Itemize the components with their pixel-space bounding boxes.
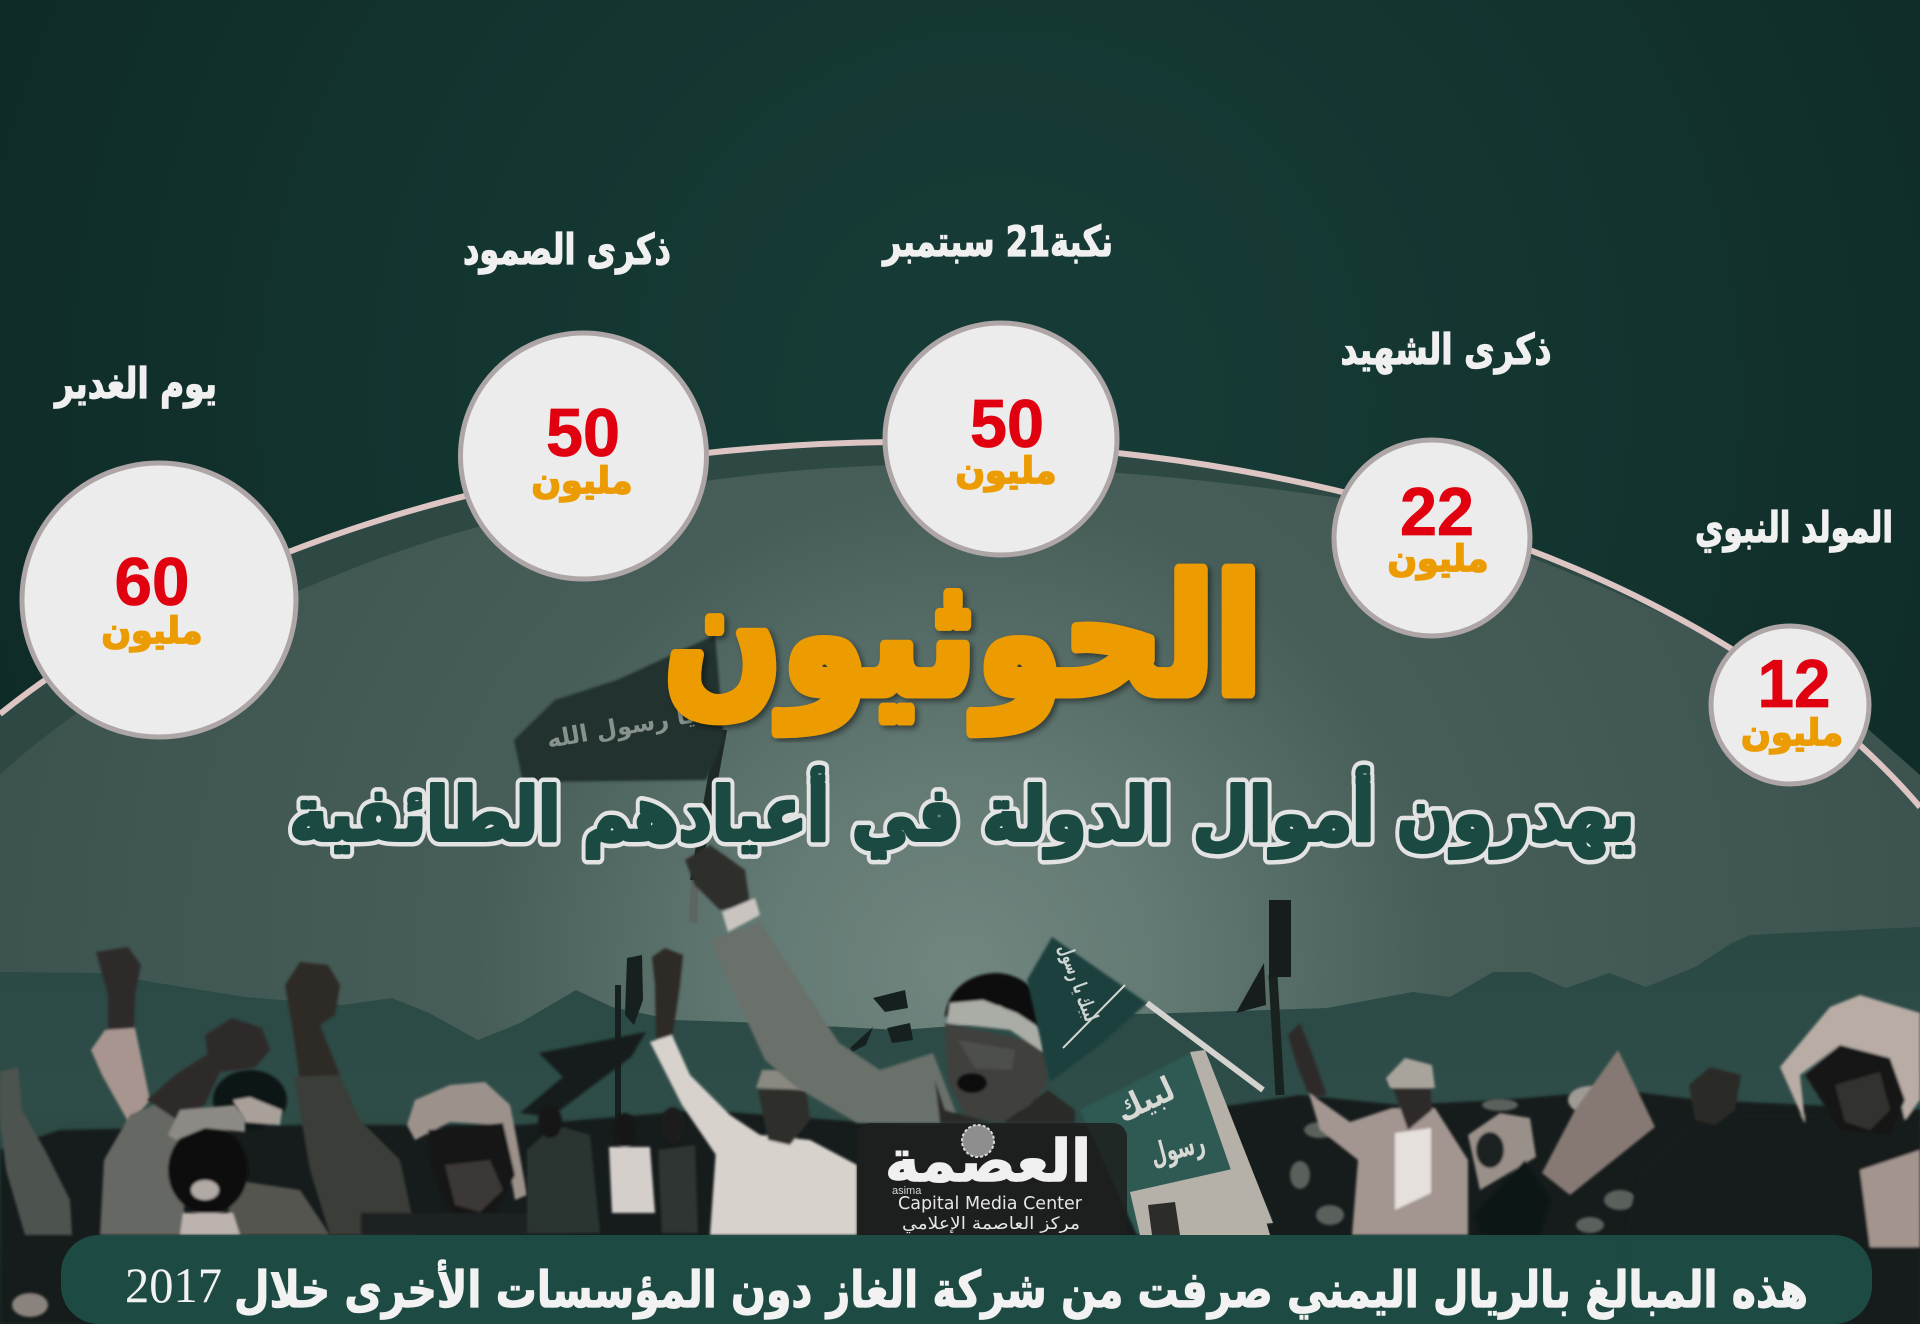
mottled crowd highlights bbox=[12, 1086, 1636, 1317]
icon: globe bbox=[962, 1125, 994, 1157]
hills bbox=[0, 927, 1920, 1324]
photo sky bbox=[0, 465, 1920, 1324]
circle: المولد النبوي bbox=[1711, 626, 1869, 784]
poster bbox=[1080, 1050, 1273, 1235]
unit: مليون bbox=[956, 451, 1056, 492]
photo: rally crowd and hills bbox=[0, 635, 1920, 1324]
title: الحوثيون bbox=[664, 543, 1262, 733]
raised black flag with pole: يا رسول الله bbox=[545, 700, 697, 754]
label: يوم الغدير: يوم الغدير bbox=[53, 359, 217, 409]
bottom banner bbox=[61, 1235, 1872, 1324]
unit: مليون bbox=[102, 611, 202, 652]
crowd base bbox=[0, 1090, 1920, 1324]
black flag bbox=[520, 1032, 646, 1117]
poster: لبيك bbox=[1110, 1069, 1181, 1131]
logo small tag: asima bbox=[892, 1185, 922, 1197]
arc band bbox=[0, 442, 1920, 1324]
value: 50 bbox=[970, 386, 1044, 462]
boy with headband bbox=[100, 1018, 330, 1235]
value: 12 bbox=[1758, 646, 1830, 722]
circle disc bbox=[885, 323, 1117, 555]
circle: ذكرى الشهيد bbox=[1334, 440, 1530, 636]
raised black flag with pole bbox=[514, 635, 727, 923]
circle disc bbox=[1334, 440, 1530, 636]
man with raised fist centre-left bbox=[285, 962, 416, 1235]
circle disc bbox=[22, 463, 296, 737]
tall banner pole bbox=[1236, 900, 1291, 1095]
label: ذكرى الصمود: ذكرى الصمود bbox=[463, 225, 671, 275]
value: 50 bbox=[546, 395, 620, 471]
subtitle bbox=[290, 766, 1634, 859]
circle: يوم الغدير bbox=[22, 463, 296, 737]
large man right bbox=[1625, 995, 1920, 1324]
background figures bbox=[527, 1106, 698, 1233]
green flag with pole bbox=[1027, 937, 1263, 1090]
unit: مليون bbox=[1388, 539, 1488, 580]
logo wordmark: العصمة bbox=[885, 1127, 1091, 1195]
unit: مليون bbox=[532, 461, 632, 502]
small figures right bbox=[1468, 1113, 1551, 1235]
circle disc bbox=[1711, 626, 1869, 784]
logo box bbox=[857, 1123, 1127, 1235]
subtitle fill: يهدرون أموال الدولة في أعيادهم الطائفية bbox=[290, 766, 1634, 859]
background head bbox=[213, 1070, 287, 1130]
green flag with pole: لبيك يا رسول bbox=[1054, 941, 1104, 1024]
circle: نكبة 21 سبتمبر bbox=[885, 323, 1117, 555]
far-left man bbox=[0, 1067, 72, 1235]
label: نكبة 21 سبتمبر: نكبة21 سبتمبر bbox=[881, 217, 1113, 267]
subtitle outline: يهدرون أموال الدولة في أعيادهم الطائفية bbox=[290, 766, 1634, 859]
arc line bbox=[0, 442, 1920, 807]
banner panel bbox=[61, 1235, 1872, 1324]
triangle banner bbox=[1542, 1050, 1655, 1195]
value: 60 bbox=[114, 544, 190, 620]
logo english name: Capital Media Center bbox=[898, 1193, 1083, 1214]
logo arabic name: مركز العاصمة الإعلامي bbox=[902, 1214, 1080, 1234]
poster: رسول bbox=[1146, 1125, 1209, 1173]
unit: مليون bbox=[1741, 713, 1843, 754]
circle: ذكرى الصمود bbox=[460, 333, 706, 579]
circle disc bbox=[460, 333, 706, 579]
distant flags bbox=[615, 955, 913, 1135]
label: ذكرى الشهيد: ذكرى الشهيد bbox=[1340, 325, 1552, 375]
man in coat with turban bbox=[1288, 1023, 1468, 1235]
man in white shirt bbox=[650, 948, 857, 1235]
man with raised fist left bbox=[91, 947, 150, 1125]
boy with turban bbox=[361, 1082, 570, 1235]
central man raising flag bbox=[685, 845, 1075, 1125]
value: 22 bbox=[1400, 474, 1474, 550]
banner year: 2017 bbox=[125, 1257, 222, 1313]
